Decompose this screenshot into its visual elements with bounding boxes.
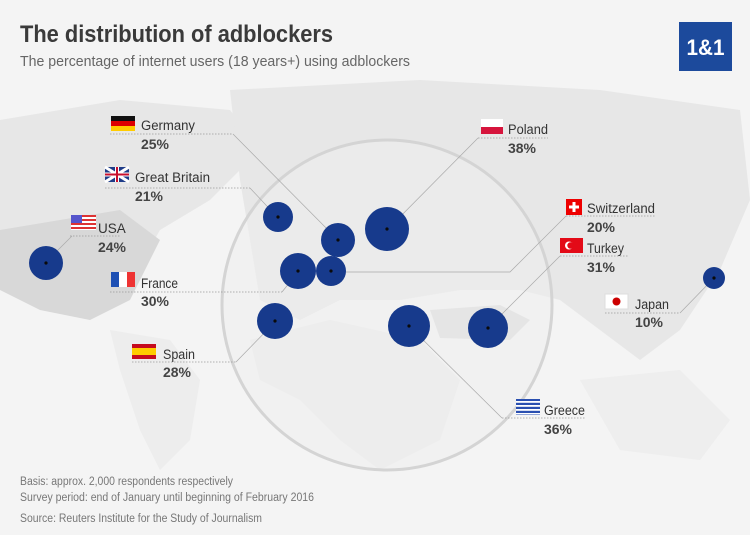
label: Turkey: 31% bbox=[587, 259, 616, 275]
world map background bbox=[0, 80, 750, 470]
label: Poland: 38% bbox=[508, 140, 537, 156]
label: Japan: 10% bbox=[635, 314, 664, 330]
label: Switzerland bbox=[566, 199, 655, 235]
label: Switzerland: 20% bbox=[587, 219, 616, 235]
footer notes: Source: Reuters Institute for the Study of Journalism bbox=[20, 513, 262, 525]
label: Switzerland: Switzerland bbox=[587, 201, 655, 216]
label: Great Britain: Great Britain bbox=[135, 170, 210, 185]
label: Greece: Greece bbox=[544, 403, 585, 418]
label: USA: 24% bbox=[98, 239, 127, 255]
label: Greece: 36% bbox=[544, 421, 573, 437]
title: The distribution of adblockers bbox=[20, 21, 333, 48]
label: Germany bbox=[111, 116, 195, 152]
footer notes: Survey period: end of January until beginning of February 2016 bbox=[20, 492, 314, 504]
label: Germany: Germany bbox=[141, 118, 195, 133]
label: Spain: 28% bbox=[163, 364, 192, 380]
footer notes bbox=[20, 476, 314, 525]
bubbles bbox=[29, 202, 725, 348]
label: USA bbox=[71, 215, 127, 255]
label: Spain bbox=[132, 344, 195, 380]
label: Japan bbox=[605, 294, 669, 330]
logo: 1&1 bbox=[686, 35, 724, 60]
label: Great Britain bbox=[105, 167, 210, 204]
label: Greece bbox=[516, 399, 585, 437]
footer notes: Basis: approx. 2,000 respondents respectively bbox=[20, 476, 233, 488]
label: France: 30% bbox=[141, 293, 170, 309]
label: Great Britain: 21% bbox=[135, 188, 164, 204]
label: Poland bbox=[481, 119, 548, 156]
label: France: France bbox=[141, 276, 178, 291]
label: Germany: 25% bbox=[141, 136, 170, 152]
label: Poland: Poland bbox=[508, 122, 548, 137]
leader lines bbox=[46, 134, 714, 418]
label: Turkey bbox=[560, 238, 624, 275]
label: France bbox=[111, 272, 178, 309]
label: Spain: Spain bbox=[163, 347, 195, 362]
label: USA: USA bbox=[98, 221, 126, 236]
label: Turkey: Turkey bbox=[587, 241, 624, 256]
zoom circle bbox=[222, 140, 552, 470]
label: Japan: Japan bbox=[635, 297, 669, 312]
subtitle: The percentage of internet users (18 years+) using adblockers bbox=[20, 53, 410, 70]
logo bbox=[679, 22, 732, 71]
